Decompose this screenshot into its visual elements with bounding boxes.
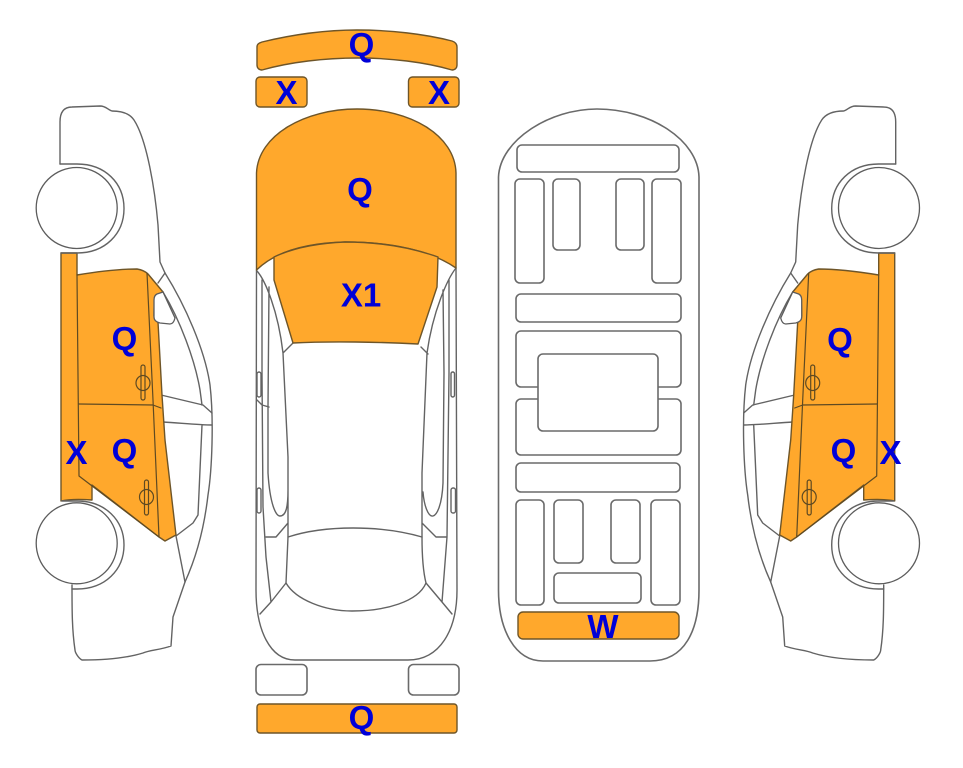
label: hood Q: Q xyxy=(347,171,373,208)
orange hood panel xyxy=(256,109,456,270)
left front light panel xyxy=(256,77,307,107)
label: right sill X: X xyxy=(879,434,902,471)
left car door handles xyxy=(136,365,154,515)
left rear light xyxy=(256,664,307,695)
label: windshield X1: X1 xyxy=(341,276,381,314)
label: left front door Q: Q xyxy=(112,320,137,357)
underside component blocks xyxy=(515,145,681,605)
label: left rear door Q: Q xyxy=(112,432,137,469)
panel: underside of car xyxy=(498,109,699,661)
top car interior lines xyxy=(257,268,456,614)
right car door seams xyxy=(795,273,879,537)
label: right rear door Q: Q xyxy=(831,432,856,469)
top car body outline xyxy=(256,268,457,660)
door handles on top view xyxy=(257,372,456,513)
rear window lines xyxy=(286,528,426,611)
right car door handles xyxy=(802,365,820,515)
panel: right side view of car xyxy=(744,106,920,660)
left car quarter window xyxy=(154,292,175,324)
right car orange door and sill panels xyxy=(780,253,895,541)
left car orange door and sill panels xyxy=(61,253,176,541)
right car quarter window xyxy=(781,292,802,324)
panel: top view of car xyxy=(256,30,459,733)
label: right front door Q: Q xyxy=(827,321,853,358)
label: underside W: W xyxy=(587,608,619,645)
left car wheels xyxy=(36,164,124,589)
label: right light X: X xyxy=(428,74,450,111)
panel: left side view of car xyxy=(36,106,212,660)
right car wheels xyxy=(832,164,920,589)
orange windshield panel xyxy=(274,242,438,344)
right car body outline xyxy=(744,106,896,660)
right car window lines xyxy=(744,273,798,582)
label: left light X: X xyxy=(275,74,298,111)
orange underside panel xyxy=(518,612,679,639)
underside outline xyxy=(498,109,699,661)
left car window lines xyxy=(158,273,212,582)
front bumper panel xyxy=(257,30,457,70)
label: front bumper Q: Q xyxy=(349,26,374,63)
label: left sill X: X xyxy=(65,434,88,471)
label: rear bumper Q: Q xyxy=(349,699,374,736)
rear bumper panel xyxy=(257,704,457,733)
right front light panel xyxy=(408,77,459,107)
left car body outline xyxy=(60,106,212,660)
left car door seams xyxy=(77,273,161,537)
right rear light xyxy=(408,664,459,695)
